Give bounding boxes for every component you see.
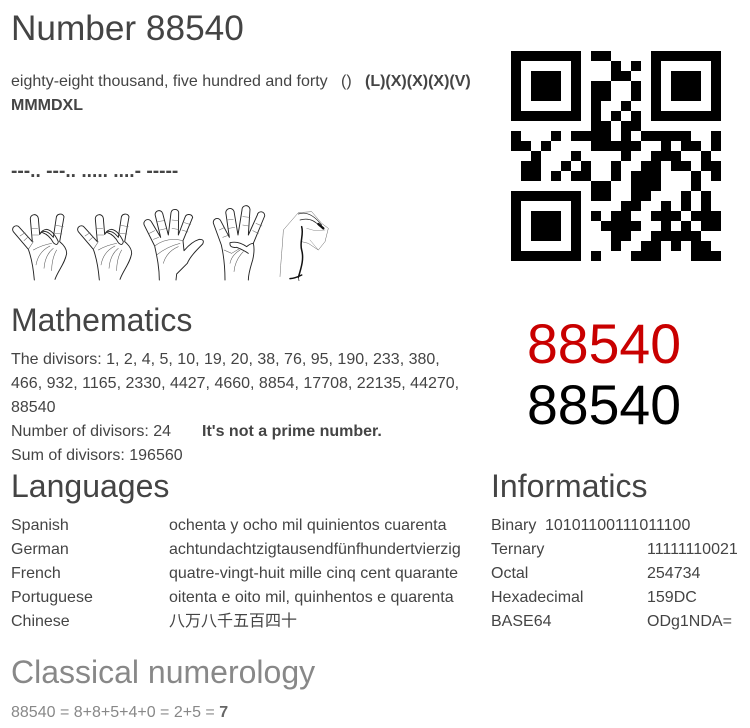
divisors and prime text: 88540 — [11, 399, 56, 416]
divisors and prime text: 466, 932, 1165, 2330, 4427, 4660, 8854, 17708, 22135, 44270, — [11, 375, 459, 392]
languages table: achtundachtzigtausendfünfhundertvierzig — [169, 541, 461, 558]
informatics table: 159DC — [647, 589, 697, 606]
languages table: German — [11, 541, 69, 558]
numerology sum: 88540 = 8+8+5+4+0 = 2+5 = 7 — [11, 704, 228, 721]
number 88540 in black: 88540 — [527, 374, 681, 436]
QR code — [511, 51, 721, 261]
number 88540 in red: 88540 — [527, 313, 681, 375]
divisors and prime text: Sum of divisors: 196560 — [11, 447, 183, 464]
informatics table: Octal — [491, 565, 528, 582]
number in words and roman numerals: eighty-eight thousand, five hundred and forty () (L)(X)(X)(X)(V) — [11, 73, 471, 90]
heading: informatics: Informatics — [491, 468, 647, 504]
languages table: Spanish — [11, 517, 69, 534]
heading: classical numerology: Classical numerology — [11, 654, 315, 690]
languages table: ochenta y ocho mil quinientos cuarenta — [169, 517, 447, 534]
divisors and prime text: The divisors: 1, 2, 4, 5, 10, 19, 20, 38, 76, 95, 190, 233, 380, — [11, 351, 440, 368]
informatics table: BASE64 — [491, 613, 551, 630]
number in words and roman numerals: MMMDXL — [11, 97, 83, 114]
icon: hand sign 0 — [280, 212, 328, 281]
title: Number 88540 — [11, 9, 244, 48]
number in words and roman numerals — [11, 73, 471, 114]
informatics table: 10101100111011100 — [545, 517, 690, 534]
icon: hand sign 8 — [13, 214, 67, 280]
informatics table: 254734 — [647, 565, 700, 582]
divisors and prime text: It's not a prime number. — [202, 423, 382, 440]
languages table: oitenta e oito mil, quinhentos e quarenta — [169, 589, 454, 606]
informatics table: Ternary — [491, 541, 544, 558]
informatics table: Binary — [491, 517, 536, 534]
languages table — [11, 517, 461, 630]
languages table: quatre-vingt-huit mille cinq cent quarante — [169, 565, 458, 582]
languages table: Chinese — [11, 613, 70, 630]
informatics table: 11111110021 — [647, 541, 738, 558]
morse code: ---.. ---.. ..... ....- ----- — [11, 161, 178, 182]
icon: hand sign 8 — [78, 214, 132, 280]
languages table: Portuguese — [11, 589, 93, 606]
languages table: French — [11, 565, 61, 582]
divisors and prime text: Number of divisors: 24 — [11, 423, 171, 440]
languages table: 八万八千五百四十 — [169, 613, 297, 630]
sign language hands — [12, 205, 329, 281]
icon: hand sign 5 — [144, 209, 203, 280]
icon: hand sign 4 — [213, 206, 265, 280]
heading: languages: Languages — [11, 468, 169, 504]
informatics table — [491, 517, 738, 630]
informatics table: ODg1NDA= — [647, 613, 732, 630]
heading: mathematics: Mathematics — [11, 302, 192, 338]
divisors and prime text — [11, 351, 459, 464]
informatics table: Hexadecimal — [491, 589, 583, 606]
